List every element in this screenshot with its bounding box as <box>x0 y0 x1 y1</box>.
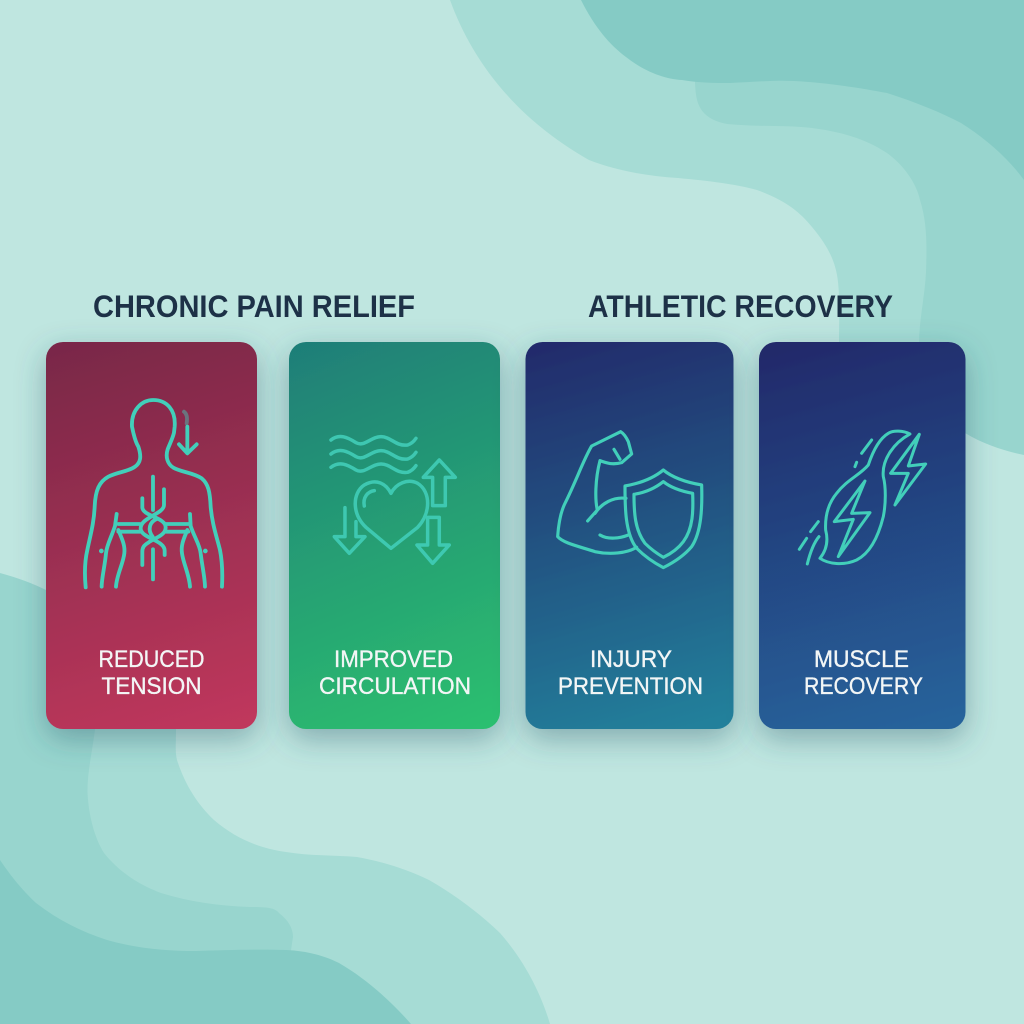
icon: heart with waves and arrows <box>331 436 455 563</box>
label: reduced tension <box>98 646 204 700</box>
heading: Athletic Recovery: ATHLETIC RECOVERY <box>588 288 893 324</box>
label: muscle recovery: MUSCLE <box>814 646 909 673</box>
label: injury prevention: INJURY <box>590 646 672 673</box>
icon: flexed arm with shield <box>558 432 702 568</box>
label: injury prevention <box>558 646 703 700</box>
label: improved circulation: CIRCULATION <box>319 673 471 700</box>
heading: Chronic Pain Relief: CHRONIC PAIN RELIEF <box>93 288 415 324</box>
label: reduced tension: REDUCED <box>98 646 204 673</box>
panel: muscle recovery <box>759 342 966 729</box>
label: muscle recovery: RECOVERY <box>804 673 923 700</box>
label: muscle recovery <box>804 646 923 700</box>
label: reduced tension: TENSION <box>102 673 202 700</box>
label: improved circulation: IMPROVED <box>334 646 453 673</box>
panel: improved circulation <box>289 342 500 729</box>
icon: muscle with lightning bolts <box>799 431 926 564</box>
label: injury prevention: PREVENTION <box>558 673 703 700</box>
panel: reduced tension <box>46 342 257 729</box>
icon: body with knotted back and down arrow <box>85 400 222 587</box>
label: improved circulation <box>319 646 471 700</box>
panel: injury prevention <box>526 342 734 729</box>
